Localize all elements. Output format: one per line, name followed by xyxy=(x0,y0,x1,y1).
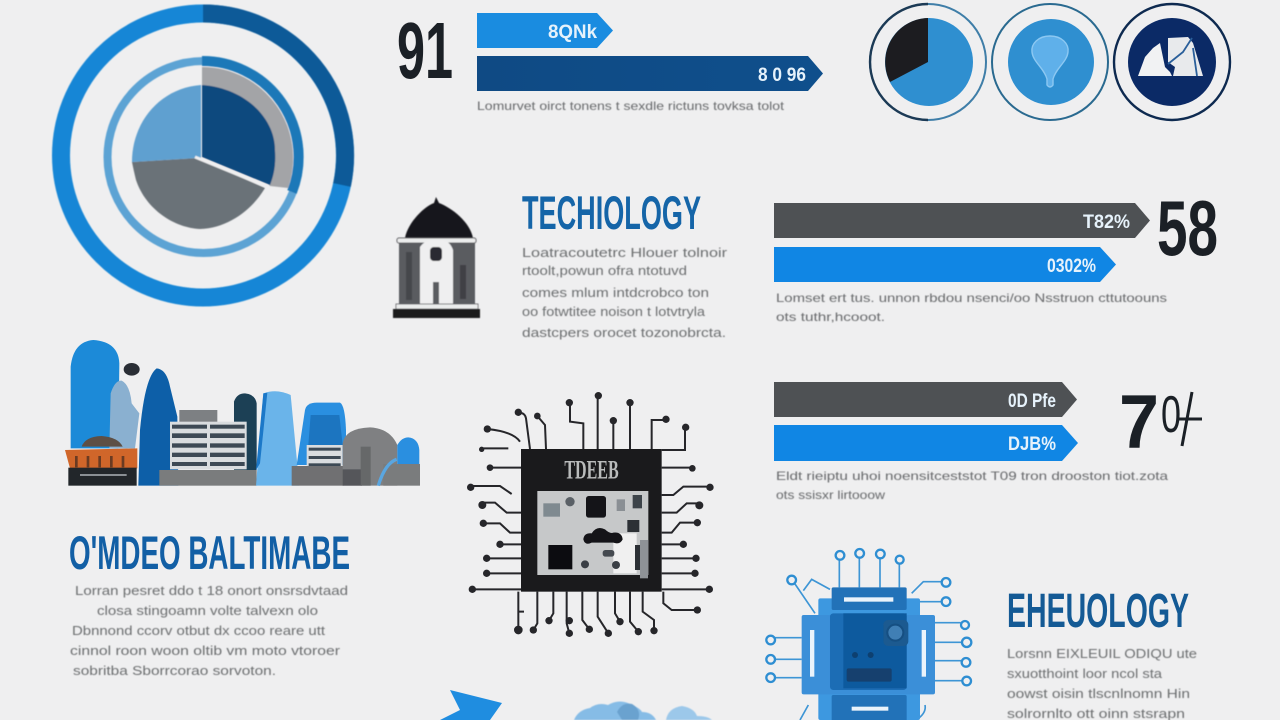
text block: baltimore: Dbnnond ccorv otbut dx ccoo reare utt xyxy=(72,623,325,638)
icon: pie circle xyxy=(870,4,986,120)
pie chart xyxy=(132,85,275,229)
icon: light bulb circle xyxy=(992,4,1108,120)
outer ring xyxy=(61,13,345,297)
processor body xyxy=(802,587,935,720)
arrow: bottom xyxy=(440,690,502,720)
middle ring xyxy=(108,61,300,253)
bar: blue 7%: DJB% xyxy=(1008,434,1056,455)
text block: technology: rtoolt,powun ofra ntotuvd xyxy=(522,263,687,278)
caption: 7% bars: ots ssisxr lirtooow xyxy=(776,488,885,502)
chip body xyxy=(521,449,662,592)
tall blue tower xyxy=(71,340,119,448)
bar: grey 58: T82% xyxy=(1083,212,1130,233)
text block: baltimore: cinnol roon woon oltib vm moto vtoroer xyxy=(70,643,341,658)
icon row xyxy=(870,4,1230,120)
caption: 7% bars: Eldt rieiptu uhoi noensitceststot T09 tron drooston tiot.zota xyxy=(776,469,1168,483)
chip pins xyxy=(467,392,714,637)
stat: 58: 58 xyxy=(1157,184,1218,272)
chip traces xyxy=(471,396,710,633)
text block: technology xyxy=(522,245,728,340)
heading: baltimore: O'MDEO BALTIMABE xyxy=(69,526,350,579)
text block: ehoology: Lorsnn EIXLEUIL ODIQU ute xyxy=(1007,646,1197,661)
text block: baltimore: Lorran pesret ddo t 18 onort onsrsdvtaad xyxy=(75,583,348,598)
text block: technology: oo fotwtitee noison t lotvtryla xyxy=(522,304,706,319)
caption: 7% bars xyxy=(776,469,1168,502)
light blue tower xyxy=(256,391,299,486)
text block: ehoology: oowst oisin tlscnlnomn Hin xyxy=(1007,686,1190,701)
icon: mountain circle xyxy=(1114,4,1230,120)
icon: domed building xyxy=(393,197,480,318)
caption: top bars: Lomurvet oirct tonens t sexdle rictuns tovksa tolot xyxy=(477,99,785,113)
skyline illustration xyxy=(65,340,420,486)
orange hall xyxy=(65,436,137,486)
text block: ehoology: sxuotthoint loor ncol sta xyxy=(1007,666,1163,681)
office block xyxy=(170,410,247,469)
bar: grey 58 xyxy=(774,203,1150,238)
processor rings xyxy=(766,549,971,685)
bar: top blue: 8QNk xyxy=(548,22,597,43)
bar: top navy: 8 0 96 xyxy=(758,65,806,86)
stat: 91: 91 xyxy=(397,6,453,95)
bar: blue 7% xyxy=(774,425,1078,461)
bar: grey 7%: 0D Pfe xyxy=(1008,391,1056,412)
bar: blue 58 xyxy=(774,247,1116,282)
grey buildings xyxy=(292,427,397,486)
text block: technology: Loatracoutetrc Hlouer tolnoir xyxy=(522,245,728,260)
blue block xyxy=(297,403,346,470)
text block: baltimore: closa stingoamn volte talvexn olo xyxy=(97,603,318,618)
small blue block xyxy=(378,437,420,486)
donut chart xyxy=(61,13,345,297)
stat: 7%: 7 xyxy=(1119,380,1159,465)
icon: clouds xyxy=(574,702,712,720)
caption: 58 bars xyxy=(776,291,1167,324)
text block: baltimore: sobritba Sborrcorao sorvoton. xyxy=(73,663,276,678)
bar: grey 7% xyxy=(774,382,1077,417)
dark orb xyxy=(124,363,140,376)
caption: 58 bars: ots tuthr,hcooot. xyxy=(776,310,885,324)
grey base xyxy=(159,470,257,486)
processor traces xyxy=(775,557,962,720)
dark blue spire xyxy=(138,368,178,486)
text block: ehoology xyxy=(1007,646,1197,720)
bar: top navy xyxy=(477,56,823,91)
icon: blue processor xyxy=(766,549,971,720)
caption: 58 bars: Lomset ert tus. unnon rbdou nsenci/oo Nsstruon cttutoouns xyxy=(776,291,1167,305)
dark tower xyxy=(234,393,257,470)
text block: technology: dastcpers orocet tozonobrcta. xyxy=(522,325,726,340)
chip die xyxy=(537,491,648,578)
chip label: TDEEB xyxy=(564,455,619,485)
pale tower xyxy=(109,381,139,448)
icon: circuit chip xyxy=(467,392,714,637)
stat: 7%: 0 xyxy=(1161,386,1181,444)
bar: blue 58: 0302% xyxy=(1047,256,1096,277)
heading: technology: TECHIOLOGY xyxy=(522,186,701,239)
bar: top blue xyxy=(477,13,613,48)
grey arc segment xyxy=(202,67,293,188)
text block: baltimore xyxy=(70,583,348,678)
stat: 7% xyxy=(1119,380,1202,465)
text block: technology: comes mlum intdcrobco ton xyxy=(522,285,709,300)
